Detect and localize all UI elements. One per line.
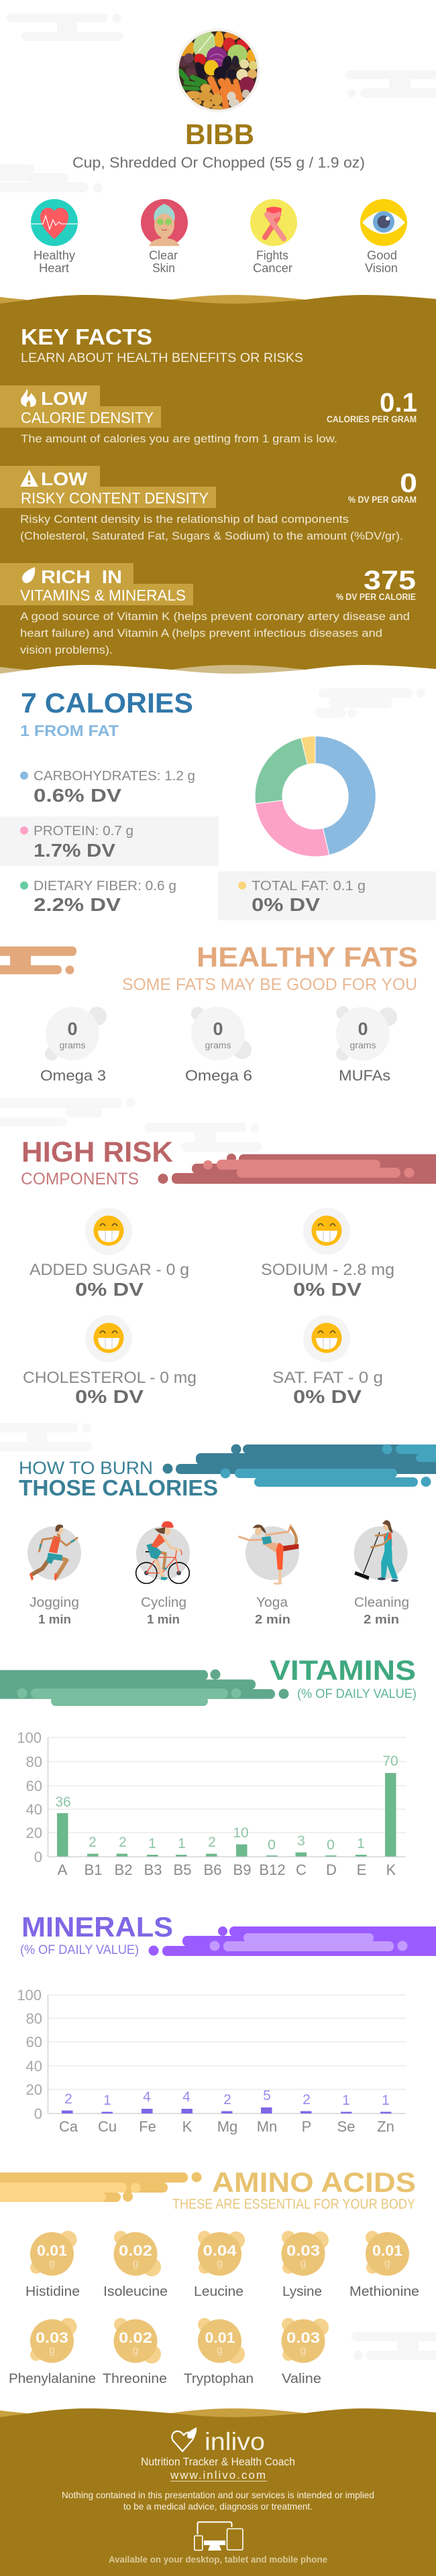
chart: minerals bar chart: 2 [223, 2092, 231, 2107]
amino: methionine [349, 2231, 419, 2299]
amino: histidine: g [49, 2258, 55, 2269]
chart: minerals bar chart: 4 [143, 2089, 151, 2105]
chart: minerals bar chart: Cu [98, 2118, 117, 2135]
icon: jogger [28, 1524, 81, 1581]
stat: omega 3: grams [60, 1040, 85, 1050]
label: cleaning: Cleaning [354, 1595, 409, 1610]
chart: vitamins bar chart: 60 [26, 1778, 42, 1794]
subheading: components: COMPONENTS [21, 1170, 139, 1188]
heading: key facts: KEY FACTS [21, 324, 152, 349]
legend: protein: 1.7% DV [34, 840, 115, 861]
chart: vitamins bar chart: 0 [327, 1837, 335, 1853]
amino: valine [282, 2318, 329, 2386]
amino: phenylalanine [9, 2318, 96, 2386]
amino: tryptophan [184, 2318, 254, 2386]
chart: vitamins bar chart: 100 [17, 1729, 42, 1746]
icon: fights cancer [250, 199, 297, 246]
stat: omega 3: Omega 3 [40, 1067, 106, 1084]
header [31, 23, 407, 275]
banner: burn [162, 1444, 436, 1487]
value: 375: 375 [364, 566, 416, 595]
chart: minerals bar chart: 1 [103, 2093, 111, 2108]
amino: threonine: 0.02 [119, 2329, 152, 2346]
banner: high risk [158, 1154, 436, 1184]
availability note: Available on your desktop, tablet and mobile phone [109, 2554, 327, 2565]
panel: healthy fats [0, 941, 418, 1084]
panel: how to burn those calories [19, 1444, 436, 1626]
stat: mufas: grams [350, 1040, 376, 1050]
amino: leucine: Leucine [194, 2284, 243, 2299]
description: A good source of Vitamin K (helps prevent coronary artery disease and [20, 610, 410, 623]
chart: minerals bar chart: Se [337, 2118, 355, 2135]
label: rich in: RICH IN [41, 566, 122, 587]
chart: vitamins bar chart: 1 [357, 1836, 365, 1851]
legend: total fat: TOTAL FAT: 0.1 g [252, 879, 366, 894]
amino: phenylalanine: g [49, 2345, 55, 2356]
logo: inlivo [172, 2427, 265, 2455]
heading: minerals: MINERALS [21, 1911, 173, 1943]
chart: minerals bar chart: 1 [342, 2093, 350, 2108]
chart: vitamins bar chart: 10 [233, 1825, 249, 1841]
item: saturated fat: 0% DV [293, 1386, 362, 1407]
icon: warning triangle [20, 470, 38, 487]
label: vitamins and minerals: VITAMINS & MINERALS [20, 587, 186, 604]
amino: valine: Valine [282, 2372, 321, 2386]
activity: yoga [239, 1524, 299, 1626]
unit: CALORIES PER GRAM [327, 414, 417, 424]
label: clear skin: Clear [149, 249, 178, 262]
activity: cleaning [354, 1520, 409, 1626]
chart: vitamins bar chart: B1 [85, 1861, 102, 1878]
tagline: Nutrition Tracker & Health Coach [141, 2455, 295, 2468]
description: heart failure) and Vitamin A (helps prevent infectious diseases and [20, 627, 382, 639]
value: 0: 0 [400, 469, 417, 498]
item: cholesterol [23, 1315, 197, 1407]
label: healthy heart: Heart [39, 261, 69, 275]
stat: omega 3: 0 [67, 1019, 78, 1039]
label: healthy heart: Healthy [34, 249, 75, 262]
icon: devices [195, 2522, 243, 2551]
chart: minerals bar chart: 80 [26, 2010, 42, 2027]
subheading: SOME FATS MAY BE GOOD FOR YOU [122, 975, 417, 994]
chart: vitamins bar chart: 2 [119, 1835, 127, 1850]
legend: protein: PROTEIN: 0.7 g [34, 824, 133, 839]
icon: cyclist [136, 1521, 190, 1583]
label: jogging: Jogging [30, 1595, 79, 1610]
chart: vitamins bar chart: A [58, 1861, 68, 1878]
label: yoga: Yoga [256, 1595, 288, 1610]
item: added sugar: 0% DV [75, 1279, 144, 1300]
chart: minerals bar chart: 5 [263, 2088, 271, 2103]
heading: 7 calories: 7 CALORIES [21, 687, 193, 719]
amino: leucine: g [217, 2258, 223, 2269]
item: added sugar: ADDED SUGAR - 0 g [30, 1261, 189, 1279]
serving size: Cup, Shredded Or Chopped (55 g / 1.9 oz) [72, 154, 365, 171]
icon: good vision [360, 199, 407, 246]
panel: calories [0, 687, 436, 920]
chart: vitamins bar chart: 80 [26, 1754, 42, 1770]
activity: jogging [28, 1524, 81, 1626]
amino: isoleucine: 0.02 [119, 2242, 152, 2259]
row highlight: protein [0, 816, 219, 866]
item: saturated fat: SAT. FAT - 0 g [272, 1369, 383, 1387]
amino: lysine: g [301, 2258, 306, 2269]
amino: histidine: Histidine [25, 2284, 80, 2299]
item: sodium: 0% DV [293, 1279, 362, 1300]
amino: valine: g [301, 2345, 306, 2356]
chart: vitamins bar chart: B6 [204, 1861, 221, 1878]
footer [0, 2408, 436, 2576]
amino: phenylalanine: Phenylalanine [9, 2372, 96, 2386]
chart: vitamins bar chart: 2 [89, 1835, 97, 1850]
item: saturated fat [272, 1315, 383, 1407]
subheading: (% OF DAILY VALUE) [297, 1687, 417, 1701]
benefits row [31, 199, 407, 275]
unit: % DV PER GRAM [348, 495, 417, 505]
amino: methionine: g [384, 2258, 390, 2269]
chart: vitamins bar chart: 0 [34, 1849, 42, 1865]
fact: calorie density [0, 385, 417, 445]
chart: vitamins bar chart: B2 [115, 1861, 132, 1878]
chart: vitamins bar chart [17, 1729, 406, 1878]
fact: rich in vitamins and minerals [0, 563, 416, 656]
icon: vegetables photo [176, 28, 260, 113]
amino: leucine: 0.04 [203, 2242, 237, 2259]
chart: vitamins bar chart: B5 [174, 1861, 191, 1878]
chart: minerals bar chart: Zn [377, 2118, 394, 2135]
panel: key facts [0, 295, 436, 678]
value: 0.1: 0.1 [380, 388, 417, 418]
chart: vitamins bar chart: 40 [26, 1801, 42, 1818]
amino: tryptophan: Tryptophan [184, 2372, 254, 2386]
label: calorie density: CALORIE DENSITY [21, 409, 154, 426]
chart: vitamins bar chart: C [296, 1861, 307, 1878]
item: cholesterol: 0% DV [75, 1386, 144, 1407]
chart: vitamins bar chart: D [326, 1861, 337, 1878]
legend: carbohydrates: CARBOHYDRATES: 1.2 g [34, 769, 195, 784]
chart: minerals bar chart: 0 [34, 2105, 42, 2122]
subheading: (% OF DAILY VALUE) [20, 1943, 139, 1957]
stat: omega 6: grams [205, 1040, 231, 1050]
chart: minerals bar chart: 2 [64, 2091, 72, 2107]
chart: vitamins bar chart: 36 [55, 1794, 71, 1810]
label: good vision: Vision [365, 261, 398, 275]
banner: vitamins [0, 1669, 288, 1706]
chart: vitamins bar chart: B9 [233, 1861, 251, 1878]
description: Risky Content density is the relationship of bad components [20, 513, 349, 526]
amino: threonine [103, 2318, 167, 2386]
logo: inlivo: inlivo [205, 2428, 265, 2455]
label: cycling: Cycling [141, 1595, 186, 1610]
chart: vitamins bar chart: 3 [297, 1833, 305, 1849]
amino: tryptophan: g [217, 2345, 223, 2356]
amino: lysine: 0.03 [286, 2242, 320, 2259]
label: low: LOW [41, 388, 88, 409]
legend: total fat [238, 879, 366, 915]
label: fights cancer: Fights [256, 249, 288, 262]
label: clear skin: Skin [152, 261, 175, 275]
banner: amino acids [0, 2172, 201, 2202]
stat: mufas: MUFAs [339, 1067, 390, 1084]
chart: minerals bar chart: P [302, 2118, 311, 2135]
amino: threonine: Threonine [103, 2372, 167, 2386]
chart: minerals bar chart: 20 [26, 2081, 42, 2098]
fact: risky content density [0, 466, 417, 542]
chart: minerals bar chart: Fe [139, 2118, 156, 2135]
legend: dietary fiber: 2.2% DV [34, 894, 121, 915]
title: BIBB [185, 119, 254, 151]
chart: vitamins bar chart: 0 [268, 1837, 276, 1853]
icon: healthy heart [31, 199, 78, 246]
chart: minerals bar chart: 100 [17, 1987, 42, 2004]
legend: carbohydrates: 0.6% DV [34, 785, 121, 806]
subheading: 1 from fat: 1 FROM FAT [20, 722, 119, 739]
chart: vitamins bar chart: B3 [144, 1861, 162, 1878]
panel: amino acids [0, 2166, 419, 2386]
label: low: LOW [41, 469, 88, 489]
amino: lysine [282, 2231, 329, 2299]
duration: 2 min [255, 1612, 290, 1626]
icon: sweeping [354, 1520, 408, 1582]
heading: amino acids: AMINO ACIDS [212, 2166, 416, 2198]
amino: methionine: Methionine [349, 2284, 419, 2299]
heading: high risk: HIGH RISK [21, 1136, 173, 1168]
chart: minerals bar chart: 2 [303, 2092, 311, 2107]
duration: 2 min [364, 1612, 399, 1626]
amino: isoleucine: g [133, 2258, 138, 2269]
amino: leucine [194, 2231, 245, 2299]
disclaimer: Nothing contained in this presentation and our services is intended or implied [62, 2490, 374, 2500]
chart: minerals bar chart: Mg [217, 2118, 237, 2135]
chart: vitamins bar chart: K [386, 1861, 396, 1878]
legend: protein [20, 824, 133, 861]
description: The amount of calories you are getting from 1 gram is low. [21, 432, 337, 445]
amino: isoleucine: Isoleucine [103, 2284, 168, 2299]
subheading: LEARN ABOUT HEALTH BENEFITS OR RISKS [21, 351, 303, 365]
stat: omega 6: Omega 6 [185, 1067, 252, 1084]
item: cholesterol: CHOLESTEROL - 0 mg [23, 1369, 197, 1387]
chart: minerals bar chart: 40 [26, 2058, 42, 2075]
amino: lysine: Lysine [282, 2284, 322, 2299]
panel: vitamins [0, 1654, 417, 1878]
label: fights cancer: Cancer [253, 261, 292, 275]
item: sodium: SODIUM - 2.8 mg [261, 1261, 394, 1279]
unit: % DV PER CALORIE [336, 592, 416, 602]
item: sodium [261, 1208, 394, 1300]
amino: methionine: 0.01 [372, 2242, 402, 2259]
heading: those calories: THOSE CALORIES [19, 1475, 218, 1500]
chart: macronutrient donut [255, 736, 376, 857]
chart: minerals bar chart: 60 [26, 2034, 42, 2050]
chart: vitamins bar chart: 2 [208, 1835, 216, 1850]
duration: 1 min [147, 1612, 180, 1626]
amino: isoleucine [103, 2231, 168, 2299]
item: added sugar [30, 1208, 189, 1300]
chart: minerals bar chart: Mn [257, 2118, 277, 2135]
legend: dietary fiber: DIETARY FIBER: 0.6 g [34, 879, 176, 894]
chart: vitamins bar chart: 70 [382, 1754, 398, 1769]
chart: vitamins bar chart: 1 [178, 1836, 186, 1851]
label: risky content density: RISKY CONTENT DENSITY [21, 489, 209, 507]
chart: minerals bar chart [17, 1987, 406, 2135]
icon: flame [21, 389, 36, 407]
legend: carbohydrates [20, 769, 195, 806]
label: good vision: Good [367, 249, 397, 262]
amino: tryptophan: 0.01 [205, 2329, 235, 2346]
chart: vitamins bar chart: B12 [259, 1861, 286, 1878]
amino: valine: 0.03 [286, 2329, 320, 2346]
stat: omega 6: 0 [213, 1019, 223, 1039]
amino: phenylalanine: 0.03 [36, 2329, 68, 2346]
chart: vitamins bar chart: E [357, 1861, 366, 1878]
panel: minerals [17, 1911, 436, 2135]
chart: vitamins bar chart: 1 [148, 1836, 156, 1851]
legend: dietary fiber [20, 879, 176, 915]
heading: how to burn: HOW TO BURN [19, 1458, 153, 1478]
website: www.inlivo.com [170, 2469, 266, 2481]
stat: omega 3 [40, 1007, 107, 1084]
activity: cycling [136, 1521, 190, 1626]
icon: leaf [22, 567, 35, 583]
amino: histidine: 0.01 [37, 2242, 67, 2259]
heading: vitamins: VITAMINS [270, 1654, 416, 1686]
chart: minerals bar chart: Ca [59, 2118, 78, 2135]
description: vision problems). [20, 643, 113, 656]
duration: 1 min [38, 1612, 71, 1626]
row highlight: total fat [218, 871, 436, 920]
disclaimer: to be a medical advice, diagnosis or treatment. [123, 2501, 313, 2512]
chart: minerals bar chart: 1 [382, 2093, 390, 2108]
legend: total fat: 0% DV [252, 894, 320, 915]
stat: mufas [336, 1006, 397, 1084]
amino: threonine: g [133, 2345, 138, 2356]
description: (Cholesterol, Saturated Fat, Sugars & Sodium) to the amount (%DV/gr). [20, 530, 403, 542]
chart: minerals bar chart: K [182, 2118, 193, 2135]
amino: histidine [25, 2231, 80, 2299]
chart: minerals bar chart: 4 [182, 2089, 190, 2105]
chart: vitamins bar chart: 20 [26, 1825, 42, 1841]
banner: minerals [149, 1926, 436, 1956]
banner: healthy fats [0, 946, 76, 975]
panel: high risk components [21, 1136, 436, 1407]
stat: mufas: 0 [358, 1019, 368, 1039]
heading: healthy fats: HEALTHY FATS [197, 941, 418, 973]
icon: yoga pose [239, 1524, 299, 1585]
stat: omega 6 [185, 1007, 252, 1084]
icon: clear skin [141, 199, 188, 246]
